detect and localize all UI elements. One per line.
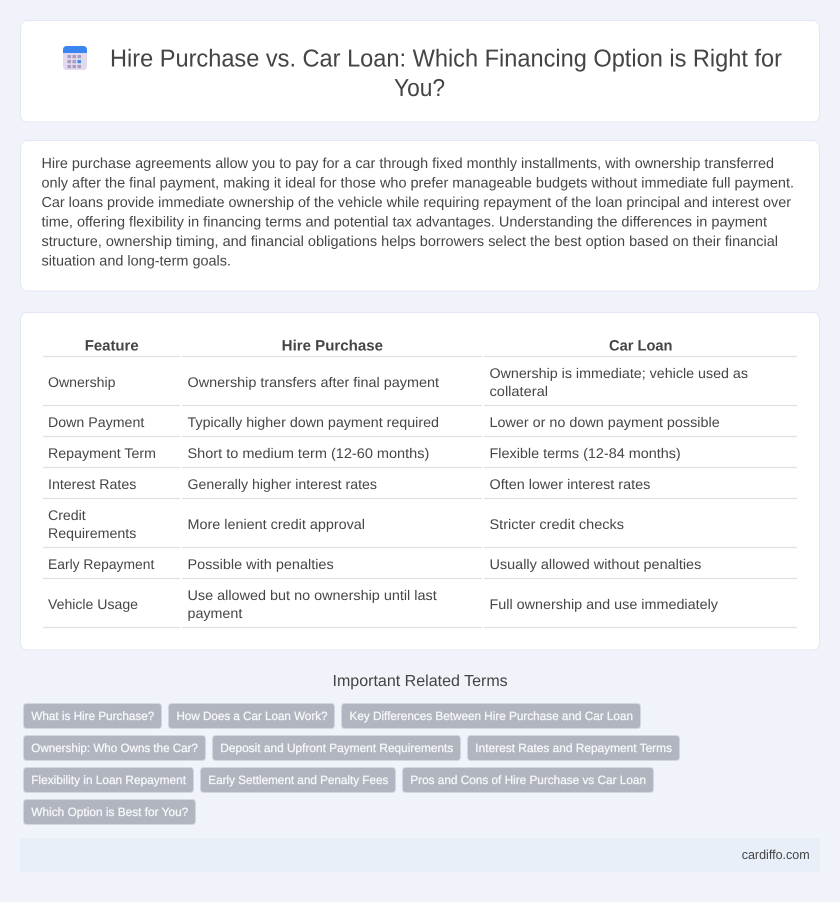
row: repayment term xyxy=(48,445,681,461)
panel: introduction text: time, offering flexibility in financing terms and potential tax advantages. Understanding the differences in payment xyxy=(42,214,767,230)
related terms chips: Ownership: Who Owns the Car? xyxy=(31,741,198,755)
panel: introduction text: structure, ownership timing, and financial obligations helps borrowers select the best option based on their financial xyxy=(42,234,778,250)
related terms chips: Pros and Cons of Hire Purchase vs Car Loan xyxy=(410,773,646,787)
title: Hire Purchase vs. Car Loan: Which Financing Option is Right for xyxy=(110,46,782,73)
related terms chips: Key Differences Between Hire Purchase and Car Loan xyxy=(350,709,633,723)
row: vehicle usage: Full ownership and use immediately xyxy=(490,596,718,612)
row: interest rates: Generally higher interest rates xyxy=(188,476,377,492)
footer: cardiffo.com xyxy=(742,847,810,862)
icon: calendar xyxy=(63,46,87,70)
row: repayment term: Short to medium term (12-60 months) xyxy=(188,445,429,461)
row: interest rates xyxy=(48,476,650,492)
row: repayment term: Flexible terms (12-84 months) xyxy=(490,445,681,461)
panel: introduction text: situation and long-term goals. xyxy=(42,254,231,270)
title xyxy=(110,46,782,102)
panel: introduction text: Car loans provide immediate ownership of the vehicle while requiring repayment of the loan principal and interest over xyxy=(42,195,791,211)
row: down payment xyxy=(48,414,720,430)
row: early repayment: Usually allowed without penalties xyxy=(490,556,701,572)
heading: important related terms: Important Related Terms xyxy=(332,673,508,690)
row: credit requirements: More lenient credit approval xyxy=(188,516,365,532)
row: interest rates: Often lower interest rates xyxy=(490,476,650,492)
row: vehicle usage xyxy=(48,587,718,621)
panel: introduction text: Hire purchase agreements allow you to pay for a car through fixed monthly installments, with ownership transferred xyxy=(42,156,774,172)
panel: title header xyxy=(20,20,820,122)
row: ownership: Ownership xyxy=(48,374,116,390)
related terms chips: What is Hire Purchase? xyxy=(31,709,155,723)
table header xyxy=(85,338,672,355)
row: ownership xyxy=(48,365,748,399)
related terms chips: How Does a Car Loan Work? xyxy=(176,709,328,723)
related terms chips: Which Option is Best for You? xyxy=(31,805,189,819)
row: down payment: Down Payment xyxy=(48,414,144,430)
table header: Car Loan xyxy=(609,338,672,355)
related terms chips: Interest Rates and Repayment Terms xyxy=(475,741,672,755)
table header: Feature xyxy=(85,338,139,355)
panel: introduction text xyxy=(20,140,820,291)
row: credit requirements: Credit xyxy=(48,507,86,523)
related terms chips xyxy=(24,704,680,824)
row: early repayment: Possible with penalties xyxy=(188,556,334,572)
related terms chips: Deposit and Upfront Payment Requirements xyxy=(220,741,453,755)
row: credit requirements xyxy=(48,507,624,541)
row: vehicle usage: Use allowed but no ownership until last xyxy=(188,587,437,603)
row: vehicle usage: payment xyxy=(188,605,242,621)
row: down payment: Lower or no down payment possible xyxy=(490,414,720,430)
row: early repayment xyxy=(48,556,701,572)
row: ownership: collateral xyxy=(490,383,548,399)
related terms chips: Flexibility in Loan Repayment xyxy=(31,773,187,787)
panel: introduction text: only after the final payment, making it ideal for those who prefer manageable budgets without immediate full payment. xyxy=(42,176,794,192)
row: credit requirements: Stricter credit checks xyxy=(490,516,624,532)
panel: comparison table xyxy=(20,312,820,650)
row: repayment term: Repayment Term xyxy=(48,445,156,461)
row: vehicle usage: Vehicle Usage xyxy=(48,596,138,612)
related terms chips: Early Settlement and Penalty Fees xyxy=(208,773,388,787)
row: interest rates: Interest Rates xyxy=(48,476,136,492)
row: ownership: Ownership transfers after final payment xyxy=(188,374,439,390)
table header: Hire Purchase xyxy=(282,338,383,355)
row: credit requirements: Requirements xyxy=(48,525,136,541)
title: You? xyxy=(394,75,445,102)
row: early repayment: Early Repayment xyxy=(48,556,154,572)
row: ownership: Ownership is immediate; vehicle used as xyxy=(490,365,748,381)
footer xyxy=(20,838,820,872)
row: down payment: Typically higher down payment required xyxy=(188,414,439,430)
